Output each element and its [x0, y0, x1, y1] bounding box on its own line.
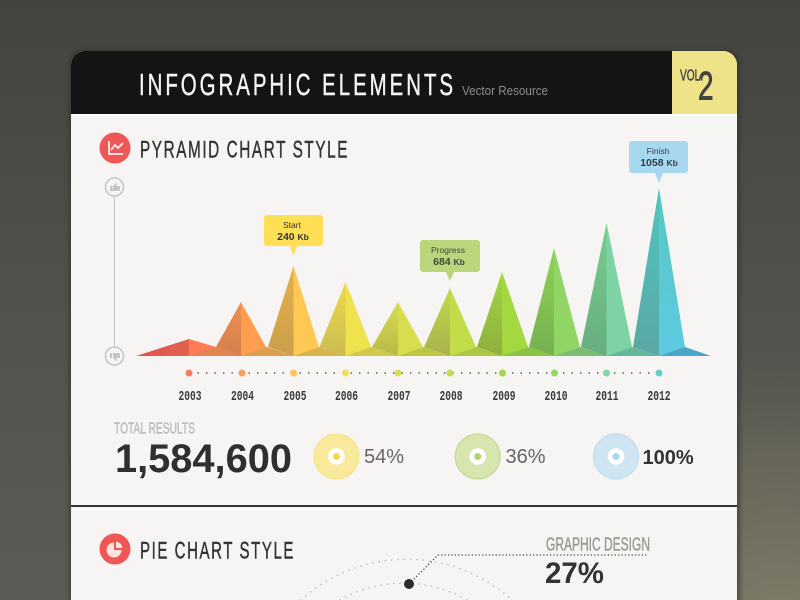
volume badge: VOL.	[680, 68, 703, 85]
label: graphic design: GRAPHIC DESIGN	[546, 535, 650, 555]
year labels: 2006	[335, 389, 358, 405]
pie chart outline arcs	[301, 559, 512, 600]
pyramid 2004	[189, 302, 268, 356]
leader line and marker	[404, 555, 648, 589]
year labels: 2008	[440, 389, 462, 405]
volume badge: 2	[698, 64, 714, 108]
value: 27%: 27%	[545, 557, 604, 590]
card	[71, 51, 737, 600]
pyramid 2003	[136, 339, 241, 356]
callout: finish	[629, 141, 688, 183]
donut stat: 100%	[594, 434, 694, 479]
year labels	[178, 389, 670, 405]
callout: finish: 1058 Kb	[640, 157, 678, 169]
heading: pie chart style: PIE CHART STYLE	[140, 537, 295, 564]
donut stat: 36%	[455, 434, 546, 479]
callout: start: 240 Kb	[277, 231, 309, 243]
callout: start	[264, 215, 323, 256]
year labels: 2004	[231, 389, 254, 405]
year labels: 2003	[178, 389, 202, 405]
pyramid 2005	[241, 266, 319, 356]
title: INFOGRAPHIC ELEMENTS	[139, 67, 456, 102]
pyramid 2006	[294, 282, 371, 356]
icon: line chart	[100, 132, 130, 164]
donut stat: 54%: 54%	[364, 446, 404, 468]
header bar	[71, 51, 737, 116]
timeline dots	[186, 370, 662, 376]
volume badge	[672, 51, 737, 114]
total results value: 1,584,600	[115, 437, 292, 481]
year labels: 2009	[492, 389, 516, 405]
year labels: 2012	[648, 389, 670, 405]
donut stat: 36%: 36%	[506, 446, 546, 468]
pyramid chart	[136, 188, 711, 356]
subtitle: Vector Resource	[462, 84, 548, 98]
pyramid 2008	[398, 288, 476, 356]
panel: pie chart	[71, 508, 737, 600]
callout: finish: Finish	[647, 146, 670, 156]
pyramid 2010	[502, 248, 580, 356]
donut stat: 54%	[314, 434, 404, 479]
year labels: 2005	[284, 389, 306, 405]
card shadow	[69, 50, 740, 600]
callout: progress: Progress	[431, 245, 465, 255]
pyramid 2009	[450, 272, 528, 356]
callout: progress	[420, 240, 480, 281]
total results label: TOTAL RESULTS	[114, 420, 195, 437]
heading: pyramid chart style: PYRAMID CHART STYLE	[140, 136, 349, 163]
pyramid 2007	[346, 302, 423, 356]
panel: pyramid chart	[71, 116, 737, 505]
pyramid 2011	[554, 223, 632, 356]
callout: start: Start	[283, 220, 302, 230]
callout: progress: 684 Kb	[433, 256, 465, 268]
year labels: 2011	[596, 389, 618, 405]
pyramid 2012	[606, 188, 711, 356]
icon: pie	[100, 534, 130, 564]
year labels: 2010	[544, 389, 568, 405]
vertical scale with thumbs icons	[106, 178, 124, 365]
donut stat: 100%: 100%	[642, 447, 694, 469]
year labels: 2007	[388, 389, 410, 405]
